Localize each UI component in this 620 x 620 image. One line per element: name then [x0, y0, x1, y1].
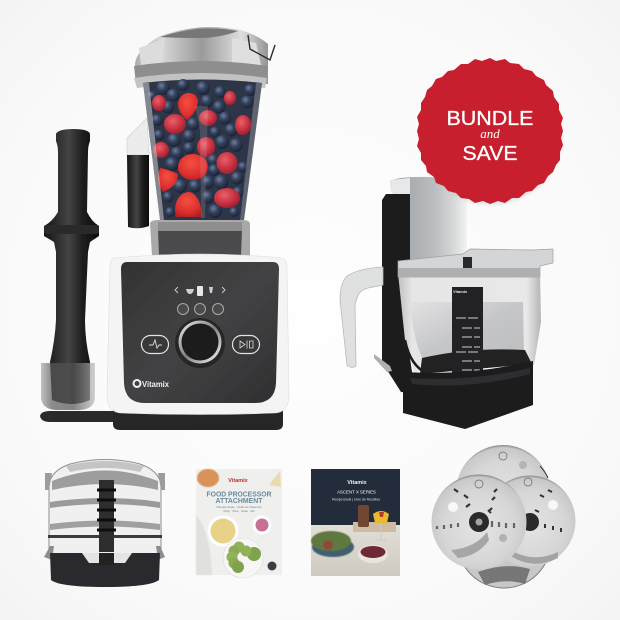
- cover butter: [269, 471, 281, 487]
- cover subtitle: Ultimate Guide · Guide de traitement: [216, 505, 262, 509]
- attachment clips: [44, 546, 165, 560]
- latch pin: [374, 354, 392, 372]
- blender feet: [113, 408, 283, 430]
- tamper shaft: [44, 129, 99, 404]
- cover title: [206, 490, 272, 505]
- blender control panel: [121, 262, 279, 403]
- tamper cup: [41, 363, 95, 410]
- cover grated bowl: [208, 516, 238, 546]
- center hub: [469, 512, 489, 532]
- badge text bundle: BUNDLE: [446, 107, 534, 130]
- badge shadow: [421, 64, 561, 204]
- cover onion bowl: [252, 516, 272, 534]
- attachment center column: [99, 480, 114, 552]
- blender: [107, 27, 289, 430]
- book: food processor attachment: [196, 469, 282, 578]
- inner bowl: [410, 302, 524, 362]
- disc: front: [432, 474, 526, 570]
- badge text save: SAVE: [462, 142, 518, 165]
- cover table: [311, 525, 400, 576]
- disc: rear bottom: [457, 494, 551, 588]
- cover title: FOOD PROCESSOR: [206, 490, 272, 498]
- badge: bundle and save: [417, 58, 563, 204]
- raspberries: [152, 91, 251, 208]
- tamper holder base plate: [40, 411, 114, 422]
- feed hole: [448, 502, 458, 512]
- pulse button: [142, 336, 168, 354]
- disc: right: [484, 476, 576, 566]
- brand logo: Vitamix: [142, 379, 169, 389]
- food processor attachment: [44, 460, 165, 587]
- jar glass highlight: [143, 83, 164, 220]
- feed tube: [390, 177, 467, 262]
- slicing blade: [451, 532, 489, 558]
- badge text and: and: [480, 126, 500, 141]
- panel mode icons: [175, 286, 225, 296]
- panel small buttons: [178, 304, 224, 314]
- jar with berries: [143, 79, 262, 220]
- bowl black curve: [405, 340, 428, 374]
- slicing discs: [432, 445, 576, 588]
- book: ascent x series: [311, 469, 400, 576]
- cover: [196, 469, 282, 575]
- food: salad plate: [311, 531, 354, 557]
- blender white body: [107, 254, 289, 414]
- disc: rear top: [456, 445, 550, 539]
- bowl black bottom: [420, 349, 532, 374]
- start stop button: [232, 336, 260, 354]
- bowl body: [398, 273, 541, 372]
- attachment discs: [50, 498, 160, 508]
- cover cucumber plate: [223, 538, 263, 578]
- measurement strip: Vitamix: [453, 289, 468, 294]
- food: wooden board: [353, 522, 396, 532]
- cover logo: Vitamix: [228, 478, 249, 484]
- scalloped seal: [417, 58, 563, 204]
- blade slots: [454, 489, 497, 513]
- jar blade stem: [195, 106, 208, 218]
- strawberries: [158, 93, 208, 217]
- cover top: [311, 469, 400, 525]
- cover subtitle: [216, 505, 262, 513]
- cover logo: Vitamix: [347, 480, 368, 486]
- cover cloth: [196, 515, 212, 575]
- cover onion: [197, 469, 219, 487]
- cover subtitle: Recipe Book | Livre de Recettes: [332, 498, 380, 502]
- jar handle: [127, 118, 149, 228]
- attachment top plate: [52, 470, 158, 490]
- bowl lid: [398, 249, 553, 277]
- cover series title: ASCENT X SERIES: [337, 490, 376, 494]
- food: yellow dessert: [373, 511, 389, 540]
- processor handle: [340, 267, 383, 367]
- attachment black base: [50, 553, 160, 587]
- food: smoothie glass: [358, 505, 369, 527]
- measurement strip: [452, 287, 483, 374]
- number mark: [475, 480, 483, 488]
- jar body: [143, 80, 262, 220]
- motor spine: [382, 194, 416, 393]
- attachment cage: [49, 460, 161, 558]
- tamper with holder: [40, 129, 114, 422]
- processor base: [403, 361, 533, 429]
- food processor: [340, 177, 553, 429]
- blueberries: [147, 79, 256, 218]
- speed dial: [175, 318, 225, 368]
- jar lid: [134, 27, 275, 88]
- cover subtitle: Chop · Slice · Grate · Mix: [223, 509, 255, 513]
- jar collar: [150, 220, 250, 256]
- food: beet bowl: [358, 545, 388, 563]
- cover title: ATTACHMENT: [216, 496, 263, 505]
- cover badge: [268, 562, 276, 570]
- tamper collar: [44, 225, 99, 234]
